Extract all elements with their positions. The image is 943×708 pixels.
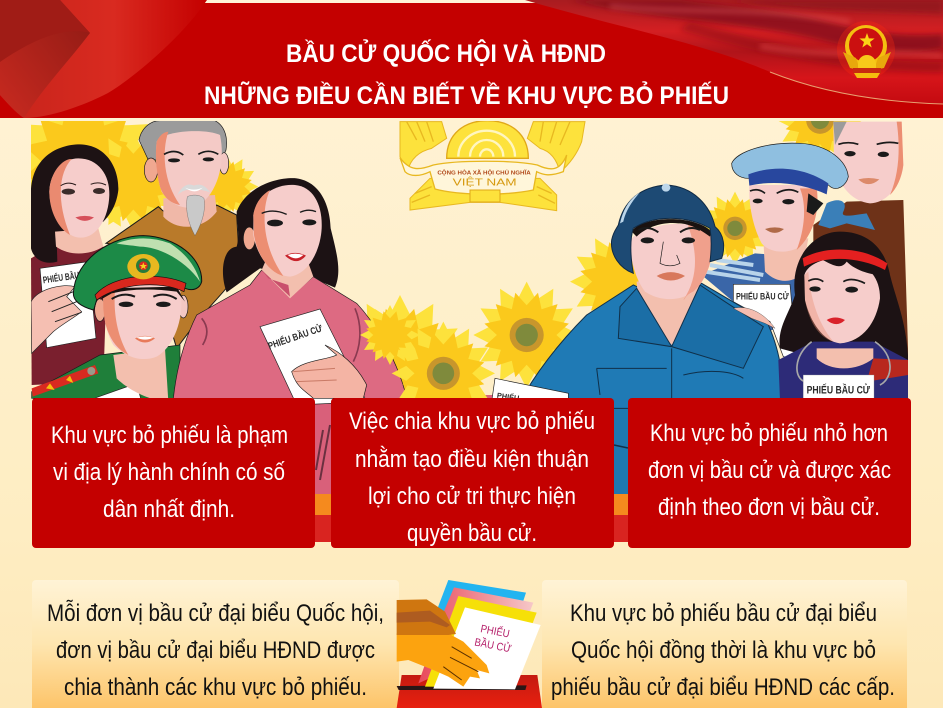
ballot paper [40, 262, 96, 348]
ballot label: BẦU CỬ [473, 636, 513, 655]
title [204, 38, 729, 110]
ballot box [397, 675, 542, 708]
ballot paper [492, 378, 569, 398]
elderly man [106, 121, 240, 348]
soldier [492, 184, 785, 408]
panel: card 3: Khu vực bỏ phiếu nhỏ hơn [650, 420, 888, 447]
left group of voters [8, 86, 467, 429]
icon: hand dropping ballot in box [397, 580, 542, 708]
banner [400, 155, 567, 194]
illustration: voters [8, 76, 908, 542]
woman in pink ao dai [173, 178, 407, 405]
panel: lower right note: phiếu bầu cử đại biểu HĐND các cấp. [551, 674, 895, 701]
ballot paper: PHIẾU BẦU CỬ [266, 322, 325, 352]
panel: lower left note: Mỗi đơn vị bầu cử đại biểu Quốc hội, [47, 600, 384, 627]
panel: lower left note [32, 580, 399, 708]
panel: card 2: nhằm tạo điều kiện thuận [355, 446, 589, 473]
woman in maroon [31, 144, 118, 385]
girl with red headband [778, 232, 908, 405]
right group of voters [360, 76, 908, 425]
ballot sheets [418, 580, 541, 689]
sunflowers left [8, 86, 467, 429]
ballot paper: PHIẾU BẦU [42, 270, 80, 286]
base [410, 178, 557, 211]
title: NHỮNG ĐIỀU CẦN BIẾT VỀ KHU VỰC BỎ PHIẾU [204, 80, 729, 110]
panel: lower right note: Quốc hội đồng thời là khu vực bỏ [571, 637, 876, 664]
panel: card 2 [331, 398, 614, 548]
panel: card 3: đơn vị bầu cử và được xác [648, 457, 891, 484]
flag fabric: top right [525, 0, 943, 104]
coat of arms emblem illustration: VIỆT NAM [453, 176, 517, 189]
panel: lower left note: chia thành các khu vực bỏ phiếu. [64, 674, 367, 701]
ballot paper [260, 309, 367, 405]
sunflowers right [360, 76, 864, 425]
panel: card 1: dân nhất định. [103, 496, 235, 523]
elder woman [813, 122, 908, 358]
ballot paper: PHIẾU BẦU CỬ [736, 290, 789, 301]
title: BẦU CỬ QUỐC HỘI VÀ HĐND [286, 38, 606, 68]
panel: lower left note: đơn vị bầu cử đại biểu HĐND được [56, 637, 375, 664]
sailor [702, 143, 875, 358]
gear [447, 121, 528, 158]
emblem: national coat of arms [837, 21, 895, 79]
panel: lower right note [542, 580, 907, 708]
ballot paper [803, 374, 874, 398]
coat of arms emblem illustration: CỘNG HÒA XÃ HỘI CHỦ NGHĨA [437, 168, 531, 176]
police officer [32, 236, 202, 402]
panel: lower right note: Khu vực bỏ phiếu bầu cử đại biểu [570, 600, 877, 627]
ballot label [473, 622, 513, 655]
ballot paper [733, 284, 797, 358]
panel: card 2: quyền bầu cử. [407, 520, 537, 547]
panel: card 3 [628, 398, 911, 548]
coat of arms emblem illustration [400, 121, 585, 211]
ballot paper: PHIẾU BẦU CỬ [807, 384, 871, 397]
panel: card 1 [32, 398, 315, 548]
ballot label: PHIẾU [479, 622, 511, 641]
strip behind cards [33, 395, 628, 542]
panel: card 1: vi địa lý hành chính có số [53, 459, 285, 486]
panel: card 2: lợi cho cử tri thực hiện [368, 483, 576, 510]
panel: card 2: Việc chia khu vực bỏ phiếu [349, 408, 595, 435]
panel: card 1: Khu vực bỏ phiếu là phạm [51, 422, 288, 449]
header banner [0, 0, 943, 118]
panel: card 3: định theo đơn vị bầu cử. [658, 494, 880, 521]
ballot paper: PHIẾU [496, 390, 520, 403]
ribbon: left fold [0, 0, 207, 118]
hand and sleeve [397, 599, 489, 687]
wheat [400, 122, 447, 172]
